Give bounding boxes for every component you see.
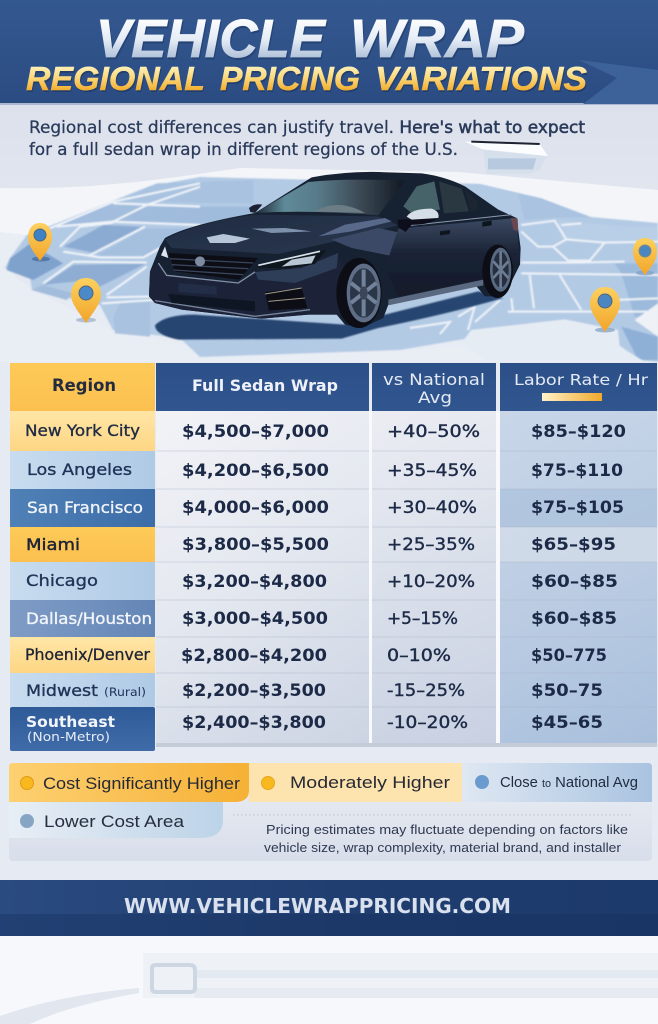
central map detail (410, 300, 500, 334)
western map cells (7, 180, 253, 337)
map of the U.S. with region grid (5, 177, 658, 362)
row label: Dallas/Houston: Dallas/Houston (26, 609, 152, 628)
eastern map cells (458, 185, 658, 361)
row label: New York City (10, 411, 155, 451)
values: vs national avg (387, 422, 480, 733)
row label: Southeast (Non-Metro): (Non-Metro) (27, 730, 110, 744)
prices: full sedan wrap: $3,200–$4,800 (182, 572, 327, 592)
legend panel (9, 763, 652, 861)
subtitle: regional pricing variations: VARIATIONS (375, 60, 587, 97)
map pins (28, 223, 657, 332)
prices: full sedan wrap: $2,400–$3,800 (182, 713, 326, 733)
pricing table (10, 363, 657, 751)
row label: San Francisco: San Francisco (27, 498, 143, 517)
legend: lower cost area: Lower Cost Area (44, 812, 185, 831)
footer banner (0, 880, 658, 936)
car body (149, 172, 521, 328)
row label: Midwest (Rural) (10, 673, 155, 707)
prices: full sedan wrap (181, 422, 329, 733)
title: vehicle wrap: WRAP (351, 11, 526, 71)
values: labor rate: $85–$120 (531, 422, 626, 442)
legend: moderately higher: Moderately Higher (290, 773, 450, 792)
header: full sedan wrap (156, 363, 369, 411)
pin: west coast south (71, 278, 101, 323)
values: vs national avg: 0–10% (387, 646, 451, 666)
header: vs national avg: vs National (383, 370, 485, 389)
header: region: Region (52, 376, 116, 396)
subtitle: regional pricing variations: REGIONAL (27, 62, 206, 99)
column: full sedan wrap (156, 363, 369, 743)
row label: Midwest (Rural): Midwest (26, 681, 98, 700)
intro text: Regional cost differences can justify travel. Here's what to expect (29, 118, 585, 138)
left mirror (249, 204, 262, 213)
legend: cost significantly higher: Cost Significantly Higher (43, 774, 240, 793)
prices: full sedan wrap: $2,800–$4,200 (181, 646, 327, 666)
door handle and tail light (440, 221, 492, 235)
row label: Miami: Miami (26, 535, 80, 554)
row label: Chicago: Chicago (26, 571, 98, 590)
title: vehicle wrap: VEHICLE (96, 9, 327, 69)
legend: lower cost area (9, 802, 223, 838)
car bumper (149, 253, 345, 319)
white ground swoosh (0, 168, 658, 250)
row label: San Francisco (10, 489, 155, 527)
car hood (165, 215, 398, 254)
values: labor rate: $50–75 (531, 681, 603, 701)
header banner (0, 0, 658, 105)
legend note (264, 822, 628, 855)
prices: full sedan wrap: $4,200–$6,500 (182, 461, 329, 481)
subtitle: regional pricing variations (26, 60, 588, 99)
map base shape (5, 177, 658, 362)
decorative road sign shape (465, 142, 548, 174)
legend: cost significantly higher (9, 763, 249, 802)
bottom backdrop with faint road sign (0, 936, 658, 1024)
legend: close to national avg (462, 763, 652, 802)
values: vs national avg: +25–35% (387, 535, 475, 555)
row label: New York City: New York City (25, 421, 140, 440)
values: vs national avg: +40–50% (387, 422, 480, 442)
car shadow (155, 291, 503, 340)
subtitle: regional pricing variations: PRICING (221, 62, 361, 99)
prices: full sedan wrap: $3,800–$5,500 (182, 535, 329, 555)
pin: southeast (590, 287, 620, 332)
car windshield (255, 180, 405, 215)
legend: close to national avg: Close to National Avg (500, 774, 638, 791)
header: region (10, 363, 155, 411)
row label: Chicago (10, 562, 155, 600)
legend: moderately higher (249, 763, 462, 802)
row label: Los Angeles: Los Angeles (27, 460, 132, 479)
car mirror (398, 209, 439, 232)
row label: Southeast (Non-Metro) (10, 707, 155, 751)
prices: full sedan wrap: $2,200–$3,500 (182, 681, 326, 701)
values: labor rate: $60–$85 (531, 572, 618, 592)
intro text (29, 118, 585, 160)
values: vs national avg: -15–25% (387, 681, 465, 701)
title: vehicle wrap: VEHICLE (97, 11, 328, 71)
subtitle: regional pricing variations: REGIONAL (26, 60, 205, 97)
values: vs national avg: -10–20% (387, 713, 468, 733)
car rear wheel (482, 245, 513, 298)
row label: Dallas/Houston (10, 600, 155, 637)
subtitle: regional pricing variations: VARIATIONS (376, 62, 588, 99)
values: labor rate: $65–$95 (531, 535, 616, 555)
header: vs national avg: Avg (418, 388, 452, 407)
values: labor rate: $45–65 (531, 713, 603, 733)
legend note: vehicle size, wrap complexity, material brand, and installer (264, 840, 622, 855)
car headlight (255, 250, 327, 269)
header: full sedan wrap: Full Sedan Wrap (192, 376, 338, 395)
row label: Miami (10, 527, 155, 562)
values: labor rate: $75–$105 (531, 498, 624, 518)
column: vs national avg (372, 363, 496, 743)
row label: Southeast (Non-Metro): Southeast (26, 713, 116, 731)
values: vs national avg: +5–15% (387, 609, 458, 629)
legend note: Pricing estimates may fluctuate depending on factors like (266, 822, 628, 837)
header: labor rate (500, 363, 657, 411)
car door side (385, 218, 520, 296)
intro text: for a full sedan wrap in different regions of the U.S. (29, 140, 458, 160)
values: labor rate: $50–775 (531, 646, 607, 666)
title: vehicle wrap: WRAP (350, 9, 525, 69)
values: labor rate: $60–$85 (531, 609, 617, 629)
pin: west coast north (28, 223, 52, 262)
car side windows (403, 181, 440, 213)
subtitle: regional pricing variations: PRICING (220, 60, 360, 97)
values: labor rate: $75–$110 (531, 461, 623, 481)
values: vs national avg: +10–20% (387, 572, 475, 592)
prices: full sedan wrap: $4,500–$7,000 (182, 422, 329, 442)
values: vs national avg: +30–40% (387, 498, 477, 518)
row label: Midwest (Rural): (Rural) (104, 685, 146, 699)
prices: full sedan wrap: $3,000–$4,500 (182, 609, 328, 629)
car grille (161, 246, 258, 280)
values: labor rate (531, 422, 626, 733)
column: region (10, 363, 155, 751)
car front wheel (336, 258, 382, 328)
header: vs national avg (372, 363, 496, 411)
website url: WWW.VEHICLEWRAPPRICING.COM (124, 894, 511, 918)
car sill (388, 280, 483, 305)
row label: Los Angeles (10, 451, 155, 489)
row label: Phoenix/Denver: Phoenix/Denver (25, 645, 150, 664)
row label: Phoenix/Denver (10, 637, 155, 673)
header: labor rate: Labor Rate / Hr (514, 371, 649, 389)
title: vehicle wrap (96, 9, 526, 71)
sedan car (149, 172, 521, 340)
header arrow accent (579, 60, 658, 104)
pin: northeast (633, 238, 657, 276)
values: vs national avg: +35–45% (387, 461, 477, 481)
prices: full sedan wrap: $4,000–$6,000 (182, 498, 329, 518)
column: labor rate per hour (500, 363, 657, 743)
